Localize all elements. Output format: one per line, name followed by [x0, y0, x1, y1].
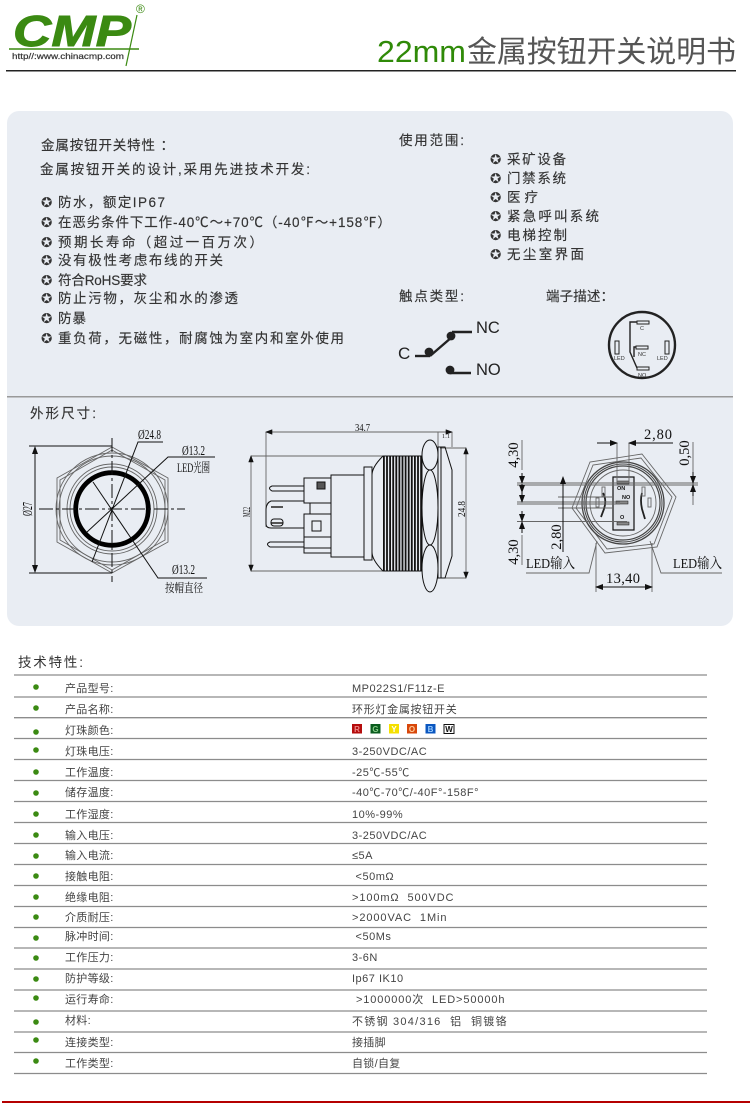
- row: LED voltage: 3-250VDC/AC: [352, 746, 427, 758]
- row: LED colours: [33, 723, 454, 737]
- feature list: 防暴: [58, 311, 86, 326]
- drawing: side view: M22: [242, 507, 253, 517]
- row: LED voltage: [33, 744, 427, 758]
- row: input current: [33, 848, 373, 862]
- drawing: rear view: 0,50: [677, 440, 693, 466]
- terminal diagram: [609, 312, 675, 379]
- row: operating temperature: 工作温度:: [65, 765, 114, 779]
- row: operating temperature: -25℃-55℃: [352, 767, 410, 779]
- contact type diagram: [398, 319, 501, 379]
- feature list: 防止污物，灰尘和水的渗透: [58, 291, 238, 306]
- drawing: front view: 按帽直径: [165, 580, 203, 595]
- application list: 紧急呼叫系统: [507, 209, 599, 224]
- row: protection rating: [33, 971, 404, 985]
- feature list: ✪: [41, 291, 52, 307]
- drawing: rear view: LED输入: [526, 556, 575, 572]
- row: name: 环形灯金属按钮开关: [352, 702, 457, 716]
- feature list: 重负荷，无磁性，耐腐蚀为室内和室外使用: [58, 330, 344, 346]
- row: input voltage: [33, 828, 427, 842]
- row: insulation resistance: 绝缘电阻:: [65, 890, 114, 904]
- row: input voltage: 3-250VDC/AC: [352, 830, 427, 842]
- drawing: front view: LED光圈: [177, 460, 210, 475]
- heading: dimensions: 外形尺寸:: [30, 406, 96, 421]
- row: LED colours: G: [372, 725, 379, 734]
- row: operating humidity: [33, 807, 403, 821]
- row: contact resistance: 接触电阻:: [65, 869, 114, 883]
- row: contact resistance: <50mΩ: [352, 871, 394, 883]
- terminal diagram: LED: [614, 356, 625, 362]
- title: 金属按钮开关说明书: [467, 36, 736, 69]
- application list: ✪: [490, 152, 501, 168]
- row: operating temperature: [33, 765, 410, 779]
- row: material: 不锈钢 304/316 铝 铜镀铬: [352, 1014, 507, 1028]
- logo: CMP: [9, 2, 145, 66]
- drawing: rear view: ON: [617, 486, 625, 492]
- drawing: side view: 1.1: [442, 434, 450, 440]
- row: operating force: 工作压力:: [65, 951, 114, 964]
- row: insulation resistance: >100mΩ 500VDC: [352, 892, 454, 904]
- drawing: rear view: 13,40: [606, 571, 640, 587]
- application list: 医疗: [507, 190, 538, 205]
- feature list: ✪: [41, 253, 52, 269]
- drawing: front view: Ø13.2: [172, 563, 195, 578]
- drawing: rear view: 2,80: [644, 427, 672, 443]
- row: name: 产品名称:: [65, 702, 114, 716]
- application list: ✪: [490, 190, 501, 206]
- footer bar: [2, 1101, 750, 1103]
- row: dielectric strength: 介质耐压:: [65, 911, 114, 924]
- drawing: rear view: [506, 427, 722, 592]
- row: working type: 工作类型:: [65, 1056, 114, 1070]
- row: model: [33, 681, 445, 695]
- drawing: rear view: 4,30: [506, 442, 522, 468]
- feature list: 在恶劣条件下工作-40℃～+70℃（-40℉～+158℉）: [58, 214, 391, 230]
- drawing: front view: Ø24.8: [138, 428, 161, 443]
- row: storage temperature: 储存温度:: [65, 785, 114, 799]
- drawing: side view: 24.8: [456, 501, 468, 517]
- drawing: rear view: NO: [622, 495, 631, 501]
- application list: 门禁系统: [507, 171, 566, 186]
- drawing: rear view: O: [620, 515, 625, 521]
- contact type diagram: NC: [476, 319, 500, 337]
- row: operating humidity: 10%-99%: [352, 809, 403, 821]
- feature list: ✪: [41, 195, 52, 211]
- title: 22mm: [377, 34, 466, 69]
- row: LED colours: Y: [391, 725, 397, 734]
- panel heading: features: 金属按钮开关特性 ：: [41, 138, 174, 153]
- row: service life: [33, 992, 505, 1006]
- feature list: [41, 195, 391, 347]
- row: working type: 自锁/自复: [352, 1056, 401, 1070]
- feature list: 预期长寿命（超过一百万次）: [58, 234, 263, 250]
- row: dielectric strength: >2000VAC 1Min: [352, 912, 447, 924]
- row: input current: ≤5A: [352, 850, 373, 862]
- row: contact resistance: [33, 869, 394, 883]
- feature list: ✪: [41, 273, 52, 289]
- intro text: 金属按钮开关的设计,采用先进技术开发:: [40, 162, 310, 177]
- drawing: front view: Ø27: [21, 502, 36, 516]
- heading: contact type: 触点类型:: [399, 289, 464, 304]
- row: model: 产品型号:: [65, 681, 114, 695]
- drawing: front view: [21, 428, 215, 595]
- row: dielectric strength: [33, 911, 447, 924]
- terminal diagram: NO: [638, 373, 647, 379]
- feature list: 符合RoHS要求: [58, 273, 148, 288]
- terminal diagram: NC: [638, 352, 646, 358]
- row: connection type: [33, 1035, 386, 1049]
- logo: CMP: CMP: [13, 7, 132, 56]
- drawing: rear view: 4,30: [506, 539, 522, 565]
- header rule: [6, 70, 736, 72]
- application list: ✪: [490, 247, 501, 263]
- drawing: rear view: 2,80: [549, 524, 565, 550]
- row: LED colours: B: [428, 725, 434, 734]
- feature list: ✪: [41, 311, 52, 327]
- terminal diagram: C: [640, 326, 644, 332]
- terminal diagram: LED: [657, 356, 668, 362]
- row: service life: >1000000次 LED>50000h: [352, 992, 505, 1006]
- drawing: side view: [242, 422, 468, 592]
- row: operating force: 3-6N: [352, 952, 378, 964]
- feature list: ✪: [41, 331, 52, 347]
- row: protection rating: 防护等级:: [65, 971, 114, 985]
- row: LED colours: R: [354, 725, 360, 734]
- row: pulse time: [33, 929, 391, 943]
- contact type diagram: NO: [476, 361, 501, 379]
- row: material: [33, 1013, 507, 1028]
- row: LED voltage: 灯珠电压:: [65, 744, 114, 758]
- row: operating humidity: 工作湿度:: [65, 807, 114, 821]
- row: service life: 运行寿命:: [65, 992, 114, 1006]
- application list: 无尘室界面: [507, 246, 584, 262]
- table: technical specifications: [14, 675, 707, 1074]
- row: insulation resistance: [33, 890, 454, 904]
- row: model: MP022S1/F11z-E: [352, 683, 445, 695]
- row: name: [33, 702, 457, 716]
- row: pulse time: <50Ms: [352, 931, 391, 943]
- application list: ✪: [490, 209, 501, 225]
- heading: terminal description: 端子描述：: [546, 289, 614, 304]
- drawing: rear view: LED输入: [673, 556, 722, 572]
- application list: ✪: [490, 228, 501, 244]
- feature list: ✪: [41, 215, 52, 231]
- logo: CMP: http//:www.chinacmp.com: [12, 51, 124, 61]
- heading: technical specifications: 技术特性:: [18, 655, 83, 670]
- drawing: front view: Ø13.2: [182, 444, 205, 459]
- row: input current: 输入电流:: [65, 848, 114, 862]
- row: pulse time: 脉冲时间:: [65, 929, 114, 943]
- row: connection type: 连接类型:: [65, 1035, 114, 1049]
- row: storage temperature: [33, 785, 479, 799]
- logo: CMP: ®: [136, 2, 145, 16]
- row: material: 材料:: [65, 1013, 91, 1027]
- feature list: 防水，额定IP67: [58, 195, 165, 210]
- feature list: 没有极性考虑布线的开关: [58, 253, 223, 268]
- panel: product information: [7, 111, 733, 626]
- contact type diagram: C: [398, 344, 410, 363]
- application list: ✪: [490, 171, 501, 187]
- row: storage temperature: -40℃-70℃/-40F°-158F°: [352, 787, 479, 799]
- heading: applications: 使用范围:: [399, 132, 464, 148]
- row: protection rating: Ip67 IK10: [352, 973, 404, 985]
- row: input voltage: 输入电压:: [65, 828, 114, 842]
- application list: 电梯控制: [507, 228, 567, 243]
- row: LED colours: 灯珠颜色:: [65, 723, 114, 737]
- row: LED colours: O: [409, 725, 415, 734]
- feature list: ✪: [41, 235, 52, 251]
- application list: 采矿设备: [507, 151, 566, 167]
- application list: [490, 151, 599, 263]
- row: working type: [33, 1056, 401, 1070]
- drawing: side view: 34.7: [355, 422, 370, 434]
- row: operating force: [33, 951, 378, 964]
- row: connection type: 接插脚: [352, 1035, 386, 1049]
- row: LED colours: W: [445, 725, 453, 734]
